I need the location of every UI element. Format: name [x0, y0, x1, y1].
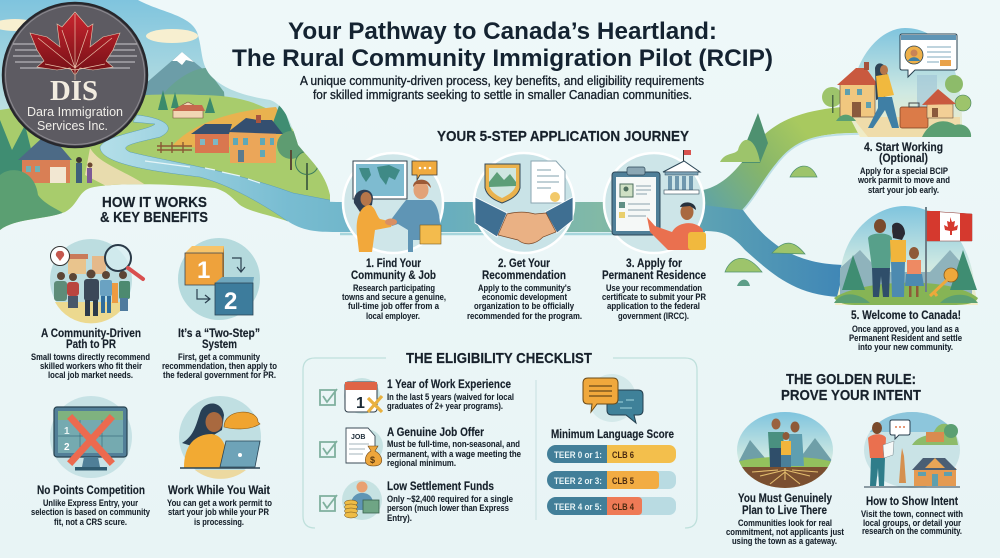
heading: 2. Get Your [498, 258, 550, 270]
body text [861, 509, 963, 536]
heading: PROVE YOUR INTENT [781, 387, 921, 404]
icon: badge, document and handshake [474, 153, 574, 253]
text [387, 392, 514, 411]
left house [22, 158, 70, 183]
body text: economic development [482, 292, 567, 302]
icon: crossed-out monitor: 1 [64, 426, 70, 437]
icon: job document and money bag: $ [370, 455, 375, 465]
text: Low Settlement Funds [387, 481, 494, 493]
heading: Permanent Residence [602, 270, 706, 282]
body text: selection is based on community [31, 507, 150, 517]
heading: THE GOLDEN RULE: [786, 371, 916, 388]
body text: skilled workers who fit their [40, 361, 143, 371]
heading: 5-step journey: YOUR 5-STEP APPLICATION JOURNEY [437, 128, 689, 145]
step 2 [467, 153, 582, 321]
icon: crossed-out monitor: 2 [64, 442, 70, 453]
subtitle: for skilled immigrants seeking to settle in smaller Canadian communities. [313, 87, 692, 102]
heading: (Optional) [879, 153, 928, 165]
text: permanent, with a wage meeting the [387, 449, 521, 459]
browser bubble [900, 34, 957, 77]
body text: commitment, not applicants just [726, 527, 844, 537]
checkbox [320, 441, 337, 457]
panel: the golden rule [726, 371, 963, 546]
body text: government (IRCC). [618, 311, 689, 321]
heading: 5. Welcome to Canada! [851, 310, 961, 322]
heading: how it works [100, 194, 208, 226]
title [232, 18, 773, 72]
body text: Visit the town, connect with [861, 509, 963, 519]
body text: Small towns directly recommend [31, 352, 150, 362]
body text: recommendation, then apply to [162, 361, 278, 371]
icon: calendar and tools: 1 [356, 395, 365, 412]
body text: local employer. [366, 311, 420, 321]
text: 1 Year of Work Experience [387, 379, 511, 391]
body text: Apply for a special BCIP [860, 166, 948, 176]
heading [781, 371, 921, 404]
logo: Dara Immigration Services: DIS [50, 75, 98, 107]
icon: job document and money bag [346, 428, 383, 466]
body text: using the town as a gateway. [732, 536, 837, 546]
logo: Dara Immigration Services [3, 3, 147, 147]
heading: You Must Genuinely [738, 493, 833, 505]
illustration: family with Canadian flag [834, 206, 978, 305]
heading: It’s a “Two-Step” [178, 328, 260, 340]
bar: TEER 0 or 1: TEER 0 or 1: [554, 450, 602, 461]
icon: job document and money bag: JOB [351, 434, 365, 441]
text: Must be full-time, non-seasonal, and [387, 439, 520, 449]
heading: language score: Minimum Language Score [551, 429, 674, 441]
logo: Dara Immigration Services: Services Inc. [37, 119, 108, 133]
body text: organization to be officially [474, 301, 574, 311]
body text: the federal government for PR. [163, 370, 276, 380]
body text [467, 283, 582, 321]
illustration: woman walking to town [822, 28, 971, 137]
heading: A Community-Driven [41, 328, 141, 340]
heading: Plan to Live There [742, 505, 827, 517]
heading [482, 258, 566, 282]
heading: How to Show Intent [866, 496, 958, 508]
bar: TEER 2 or 3: CLB 5 [612, 476, 635, 487]
fork: green branch [703, 106, 868, 215]
heading [178, 328, 260, 351]
text [387, 439, 521, 468]
step 1 [342, 153, 446, 321]
icon: clipboard, government building and person [604, 150, 706, 253]
checkbox [320, 389, 337, 405]
text: A Genuine Job Offer [387, 427, 484, 439]
body text: Use your recommendation [606, 283, 702, 293]
body text: Communities look for real [738, 518, 832, 528]
text: Only ~$2,400 required for a single [387, 494, 513, 504]
body text: Research participating [353, 283, 435, 293]
fork: blue branch [703, 205, 845, 297]
heading [602, 258, 706, 282]
body text: into your new community. [858, 342, 953, 352]
item: settlement funds [320, 480, 513, 523]
heading: 3. Apply for [626, 258, 682, 270]
body text [602, 283, 707, 321]
text: Entry). [387, 513, 412, 523]
panel: two-step system [162, 238, 278, 380]
illustration: man researching the town [864, 412, 960, 488]
landscape illustration [0, 0, 340, 235]
bar: TEER 4 or 5: TEER 4 or 5: [554, 502, 602, 513]
bar: TEER 4 or 5 [547, 497, 676, 515]
body text: Unlike Express Entry, your [43, 498, 138, 508]
heading: Community & Job [351, 270, 436, 282]
heading: how it works: HOW IT WORKS [102, 194, 207, 211]
panel: work while you wait [167, 396, 273, 527]
body text: full-time job offer from a [348, 301, 439, 311]
heading [351, 258, 436, 282]
heading: 4. Start Working [864, 142, 943, 154]
bar: TEER 2 or 3 [547, 471, 676, 489]
icon: calendar and tools [344, 378, 382, 414]
heading: Recommendation [482, 270, 566, 282]
body text: You can get a work permit to [167, 498, 273, 508]
subtitle: A unique community-driven process, key benefits, and eligibility requirements [300, 73, 704, 88]
maple leaf [30, 12, 120, 74]
body text: is processing. [194, 517, 244, 527]
title: Your Pathway to Canada’s Heartland: [288, 18, 717, 45]
panel: no points competition [31, 396, 150, 527]
body text [167, 498, 273, 527]
body text [162, 352, 278, 380]
logo: Dara Immigration Services: Dara Immigration [27, 105, 123, 119]
bar: TEER 2 or 3: TEER 2 or 3: [554, 476, 602, 487]
heading [738, 493, 833, 517]
text [387, 494, 513, 523]
step 3 [602, 150, 707, 321]
bar: TEER 4 or 5: CLB 4 [612, 502, 635, 513]
body text: start your job early. [868, 185, 939, 195]
body text: towns and secure a genuine, [342, 292, 446, 302]
body text: Permanent Resident and settle [849, 333, 962, 343]
river [100, 114, 330, 222]
icon: numbered cubes: 1 [197, 257, 210, 284]
icon: community crowd [50, 239, 143, 323]
checkbox [320, 495, 337, 511]
step 5 [834, 206, 978, 352]
family [76, 157, 82, 163]
heading: No Points Competition [37, 485, 145, 497]
text: person (much lower than Express [387, 503, 509, 513]
body text: certificate to submit your PR [602, 292, 707, 302]
body text: local groups, or detail your [863, 518, 961, 528]
body text: First, get a community [178, 352, 260, 362]
body text [857, 166, 950, 195]
body text: Apply to the community's [478, 283, 571, 293]
panel: community-driven path [31, 239, 150, 380]
trees and bushes by river fork [720, 113, 817, 286]
heading: Work While You Wait [168, 485, 270, 497]
body text [849, 324, 962, 352]
heading [864, 142, 943, 165]
body text [726, 518, 844, 546]
body text: research on the community. [862, 526, 962, 536]
body text: work parmit to move and [857, 175, 950, 185]
heading: how it works: & KEY BENEFITS [100, 209, 208, 226]
panel: eligibility checklist [303, 350, 697, 528]
body text: local job market needs. [48, 370, 133, 380]
body text: application to the federal [607, 301, 700, 311]
body text: Once approved, you land as a [852, 324, 959, 334]
title: The Rural Community Immigration Pilot (RCIP) [232, 45, 773, 72]
icon: woman with laptop and hard hat [179, 396, 261, 479]
icon: crossed-out monitor [50, 396, 132, 478]
centre houses [173, 102, 203, 118]
heading [41, 328, 141, 351]
heading: Path to PR [66, 339, 117, 351]
body text [31, 498, 150, 527]
text: graduates of 2+ year programs). [387, 401, 503, 411]
heading: THE ELIGIBILITY CHECKLIST [406, 350, 592, 367]
text: regional minimum. [387, 458, 456, 468]
illustration: rooted family [737, 412, 833, 489]
body text [31, 352, 150, 380]
step 4 [822, 28, 971, 195]
heading: System [202, 339, 237, 351]
river path and forks [286, 106, 868, 297]
item: job offer [320, 427, 521, 468]
subtitle [300, 73, 704, 102]
item: work experience [320, 378, 514, 414]
text: In the last 5 years (waived for local [387, 392, 514, 402]
body text: start your job while your PR [168, 507, 270, 517]
body text: fit, not a CRS scure. [54, 517, 127, 527]
icon: numbered cubes: 2 [224, 288, 237, 315]
heading: 1. Find Your [366, 258, 421, 270]
icon: map and handshake [343, 153, 443, 253]
bar: TEER 0 or 1: CLB 6 [612, 450, 634, 461]
fence [157, 142, 192, 153]
bar: TEER 0 or 1 [547, 445, 676, 463]
icon: speech bubbles [583, 374, 643, 423]
icon: person with coins and bill [342, 480, 382, 520]
icon: numbered cubes [178, 238, 260, 320]
body text: recommended for the program. [467, 311, 582, 321]
body text [342, 283, 446, 321]
